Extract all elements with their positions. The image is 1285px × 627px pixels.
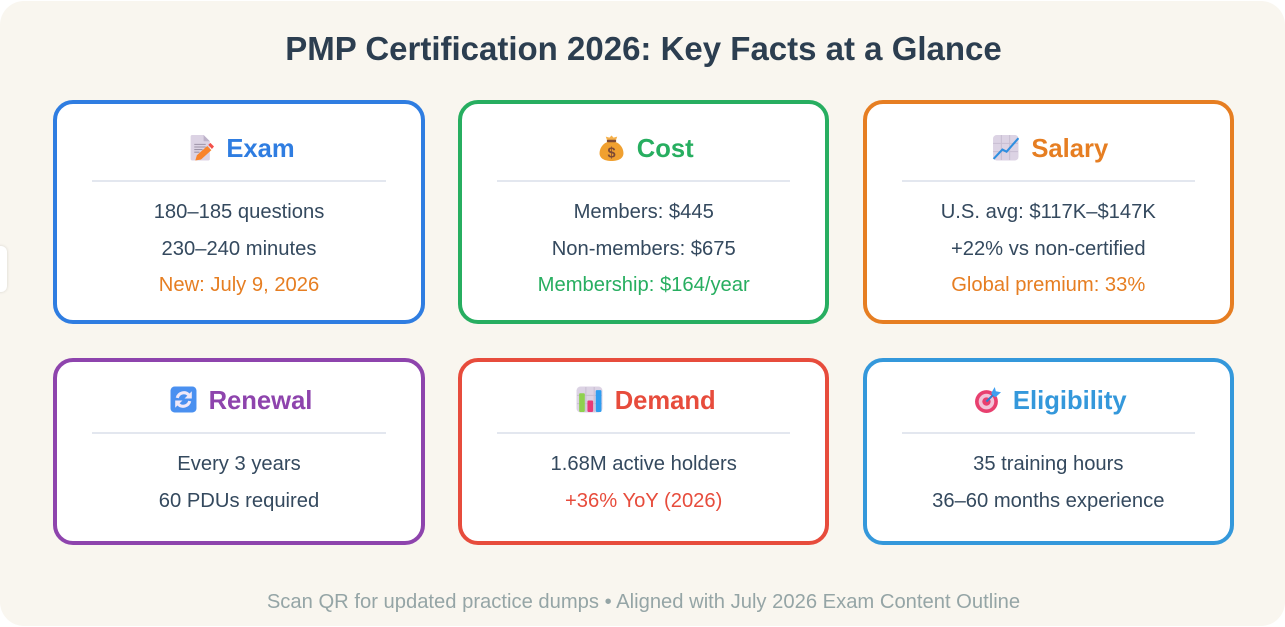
panel: renewal bbox=[53, 358, 425, 545]
text: versus: +22% vs non-certified bbox=[951, 238, 1146, 260]
footer note: Scan QR for updated practice dumps • Aligned with July 2026 Exam Content Outline bbox=[267, 591, 1020, 613]
text: global premium: Global premium: 33% bbox=[951, 274, 1145, 296]
panel: salary bbox=[863, 100, 1234, 324]
heading: cost bbox=[600, 135, 694, 163]
heading: cost: $ bbox=[607, 145, 615, 161]
text: membership: Membership: $164/year bbox=[538, 274, 750, 296]
heading: cost: Cost bbox=[637, 135, 694, 163]
heading: eligibility: Eligibility bbox=[1013, 387, 1127, 415]
panel: exam bbox=[53, 100, 425, 324]
text: PDUs: 60 PDUs required bbox=[159, 490, 319, 512]
panel: demand bbox=[458, 358, 829, 545]
text: questions: 180–185 questions bbox=[154, 201, 324, 223]
text: growth: +36% YoY (2026) bbox=[565, 490, 722, 512]
text: holders: 1.68M active holders bbox=[551, 453, 737, 475]
text: experience: 36–60 months experience bbox=[932, 490, 1164, 512]
heading: salary bbox=[992, 135, 1108, 163]
text: training: 35 training hours bbox=[973, 453, 1123, 475]
side tab bbox=[0, 246, 7, 292]
text: new date: New: July 9, 2026 bbox=[159, 274, 319, 296]
text: frequency: Every 3 years bbox=[177, 453, 301, 475]
heading: exam bbox=[190, 135, 295, 163]
panel: cost bbox=[458, 100, 829, 324]
heading: salary: Salary bbox=[1031, 135, 1108, 163]
text: non-members: Non-members: $675 bbox=[552, 238, 736, 260]
text: members: Members: $445 bbox=[574, 201, 714, 223]
title: PMP Certification 2026: Key Facts at a Glance bbox=[285, 30, 1002, 67]
heading: exam: Exam bbox=[226, 135, 295, 163]
text: minutes: 230–240 minutes bbox=[162, 238, 316, 260]
text: average: U.S. avg: $117K–$147K bbox=[941, 201, 1156, 223]
panel: eligibility bbox=[863, 358, 1234, 545]
heading: renewal: Renewal bbox=[209, 387, 312, 415]
heading: demand: Demand bbox=[615, 387, 716, 415]
